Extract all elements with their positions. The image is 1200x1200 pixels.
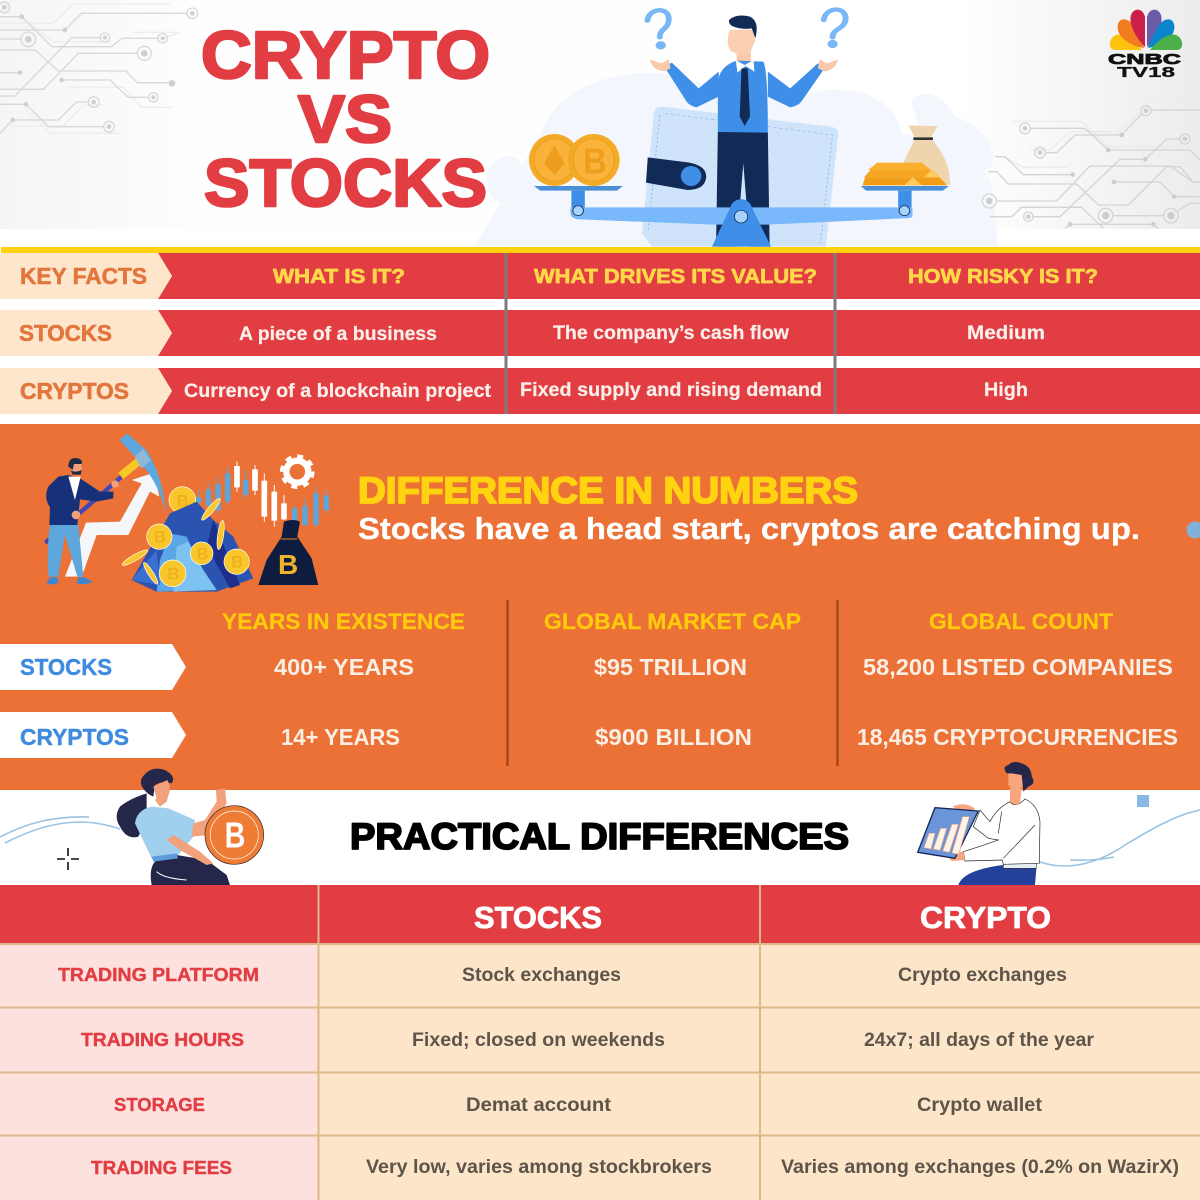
header row — [0, 253, 1200, 299]
sparkle icon — [57, 848, 79, 870]
table header: STOCKS — [474, 900, 602, 935]
bitcoin money bag: B — [278, 549, 298, 580]
trading platform row: Stock exchanges — [462, 965, 621, 986]
trading hours row: Fixed; closed on weekends — [412, 1030, 665, 1051]
storage row — [114, 1094, 1043, 1116]
column headings: YEARS IN EXISTENCE — [222, 609, 465, 634]
trading fees row: Varies among exchanges (0.2% on WazirX) — [781, 1157, 1179, 1178]
stocks row: Medium — [967, 323, 1045, 344]
coin mountain: B — [197, 544, 209, 563]
coin mountain — [121, 487, 253, 592]
coin mountain: B — [167, 564, 179, 583]
column headings: GLOBAL COUNT — [929, 609, 1114, 634]
trading hours row: TRADING HOURS — [81, 1029, 244, 1050]
candlesticks — [199, 462, 326, 527]
panel: practical differences table — [0, 885, 1200, 1200]
trading fees row — [91, 1157, 1179, 1178]
rising arrow — [65, 473, 159, 577]
cryptos numbers row: CRYPTOS — [20, 724, 129, 750]
cryptos numbers row — [0, 712, 1178, 758]
storage row: STORAGE — [114, 1094, 205, 1115]
circuit pattern left — [0, 2, 198, 133]
question marks — [647, 9, 846, 47]
wallet — [642, 107, 838, 247]
bitcoin money bag — [258, 520, 318, 585]
cryptos row — [0, 368, 1200, 414]
panel: practical differences — [0, 762, 1200, 885]
stocks row: A piece of a business — [239, 324, 437, 345]
trading hours row — [81, 1029, 1095, 1051]
logo sub-wordmark: TV18 — [1117, 64, 1175, 81]
trading platform row: Crypto exchanges — [898, 965, 1067, 986]
scale and coins: B — [583, 142, 607, 182]
subheading: Stocks have a head start, cryptos are catching up. — [358, 511, 1140, 546]
logo peacock — [1110, 10, 1182, 50]
background blobs — [473, 73, 998, 247]
illustration: man holding chart tablet — [918, 762, 1040, 885]
panel: difference in numbers — [0, 424, 1200, 790]
table header: CRYPTO — [920, 900, 1051, 935]
stocks numbers row: STOCKS — [20, 654, 112, 680]
coin mountain: B — [177, 492, 189, 511]
stocks numbers row — [0, 644, 1173, 690]
illustration: woman holding bitcoin — [117, 769, 264, 885]
table header — [0, 885, 1200, 944]
trading fees row: TRADING FEES — [91, 1157, 232, 1178]
panel: key facts table — [0, 247, 1200, 414]
logo wordmark: CNBC — [1108, 51, 1181, 68]
column headings: GLOBAL MARKET CAP — [544, 609, 801, 634]
storage row: Crypto wallet — [917, 1095, 1043, 1116]
illustration: bitcoin miner — [46, 433, 326, 592]
coin mountain: B — [154, 528, 166, 547]
header row: HOW RISKY IS IT? — [908, 266, 1098, 288]
section heading — [358, 470, 1140, 546]
cryptos row: Fixed supply and rising demand — [520, 380, 822, 401]
illustration: man weighing crypto and gold on scale — [529, 9, 950, 247]
cryptos row: Currency of a blockchain project — [184, 381, 492, 402]
heading: PRACTICAL DIFFERENCES — [350, 816, 849, 857]
decorative swooshes — [0, 810, 1200, 866]
stocks numbers row: $95 TRILLION — [594, 654, 747, 680]
column headings — [222, 609, 1114, 634]
blue square icon — [1137, 795, 1149, 807]
stocks numbers row: 400+ YEARS — [274, 654, 414, 680]
title line 1: CRYPTO — [201, 18, 490, 93]
miner — [46, 458, 119, 585]
cryptos row: CRYPTOS — [20, 378, 129, 404]
header row: KEY FACTS — [20, 263, 147, 289]
storage row: Demat account — [466, 1095, 612, 1116]
scale and coins — [529, 125, 950, 247]
trading hours row: 24x7; all days of the year — [864, 1030, 1095, 1051]
chart tablet — [918, 808, 978, 858]
trading platform row: TRADING PLATFORM — [58, 964, 259, 985]
pickaxe — [47, 433, 166, 542]
trading platform row — [58, 964, 1067, 986]
panel: header — [0, 0, 1200, 247]
bitcoin coin — [205, 806, 264, 864]
stocks row: The company’s cash flow — [553, 323, 789, 344]
circuit pattern right — [982, 101, 1200, 228]
title line 2: VS — [298, 82, 392, 157]
cryptos numbers row: 14+ YEARS — [281, 724, 400, 750]
stocks row: STOCKS — [19, 320, 112, 346]
man — [650, 16, 838, 247]
trading fees row: Very low, varies among stockbrokers — [366, 1157, 712, 1178]
coin mountain: B — [231, 553, 243, 572]
cryptos row: High — [984, 380, 1028, 401]
cryptos numbers row: $900 BILLION — [595, 724, 752, 750]
cryptos numbers row: 18,465 CRYPTOCURRENCIES — [857, 724, 1178, 750]
bitcoin coin: B — [225, 814, 245, 855]
title — [201, 18, 490, 221]
header row: WHAT IS IT? — [273, 266, 405, 288]
gear — [282, 456, 313, 487]
logo: CNBC TV18 — [1108, 10, 1182, 81]
stocks row — [0, 310, 1200, 356]
heading line: DIFFERENCE IN NUMBERS — [358, 470, 858, 511]
title line 3: STOCKS — [204, 146, 487, 221]
stocks numbers row: 58,200 LISTED COMPANIES — [863, 654, 1173, 680]
header row: WHAT DRIVES ITS VALUE? — [534, 266, 817, 288]
